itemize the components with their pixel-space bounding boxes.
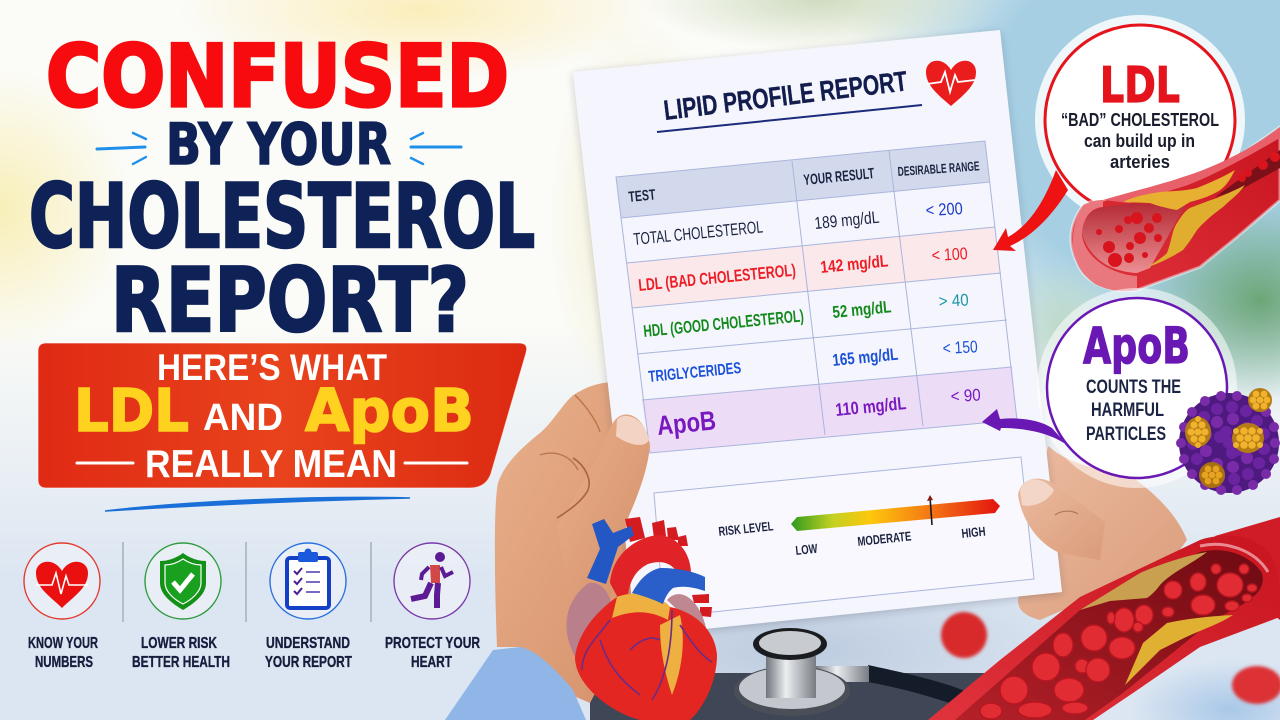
arterial plaque [1080, 552, 1233, 685]
row: ApoB: ApoB [656, 405, 717, 441]
right hand behind paper [1018, 446, 1187, 620]
row: LDL: LDL (BAD CHOLESTEROL) [638, 261, 797, 295]
artery illustration: top [1071, 127, 1280, 291]
icon: runner [411, 552, 453, 608]
row: total cholesterol: < 200 [925, 199, 963, 220]
floating blood cell [941, 612, 987, 658]
subtitle banner [38, 343, 527, 488]
table header row: TEST [628, 186, 656, 206]
row: triglycerides: 165 mg/dL [832, 345, 899, 370]
subtitle banner: ApoB [305, 376, 474, 445]
row: HDL [643, 290, 969, 341]
benefit: lower risk better health: BETTER HEALTH [132, 654, 230, 671]
row: total cholesterol: 189 mg/dL [814, 208, 880, 233]
floating blood cell [1232, 666, 1280, 704]
benefit: know your numbers: NUMBERS [35, 654, 93, 671]
icon: anatomical heart [566, 517, 717, 720]
icon: heart with pulse [36, 562, 88, 608]
headline: CHOLESTEROL [29, 165, 535, 268]
row: ApoB: < 90 [950, 385, 981, 406]
blue pulmonary artery [632, 568, 705, 604]
blue accent strokes [97, 133, 461, 164]
row: LDL: < 100 [931, 244, 968, 265]
benefit: understand your report: YOUR REPORT [265, 654, 352, 671]
row: triglycerides [648, 337, 978, 386]
coronary vessels [582, 610, 712, 700]
report title [657, 65, 922, 132]
red blood cells [980, 564, 1257, 719]
subtitle banner: HERE’S WHAT [157, 347, 387, 388]
left hand behind paper [495, 382, 660, 703]
row: HDL: HDL (GOOD CHOLESTEROL) [643, 306, 805, 341]
row: LDL [638, 244, 968, 295]
row: ApoB: 110 mg/dL [834, 393, 907, 420]
callout: ApoB: COUNTS THE [1086, 377, 1181, 398]
row: HDL: > 40 [938, 290, 969, 311]
benefit: understand your report [265, 543, 352, 671]
icon: shield with check [160, 553, 206, 610]
callout: ApoB: PARTICLES [1086, 424, 1166, 445]
row: triglycerides: < 150 [942, 337, 978, 358]
sleeve [445, 647, 586, 720]
aorta arch [610, 535, 691, 598]
headline: BY YOUR [166, 112, 391, 178]
table row fills [616, 141, 1017, 453]
row: ApoB [656, 385, 981, 441]
table surface [590, 673, 990, 720]
row: LDL: 142 mg/dL [820, 251, 889, 277]
benefit: lower risk better health [132, 543, 230, 671]
table header row: DESIRABLE RANGE [897, 158, 980, 179]
callout: ApoB [1047, 298, 1227, 478]
right thumb [1018, 479, 1105, 560]
row: triglycerides: TRIGLYCERIDES [648, 360, 742, 386]
subtitle banner: REALLY MEAN [145, 443, 397, 486]
upper red vessel stubs [625, 517, 712, 617]
callout: LDL [1045, 25, 1235, 215]
callout: ApoB: HARMFUL [1091, 400, 1164, 421]
benefit: protect your heart: PROTECT YOUR [385, 635, 480, 652]
halo around LDL callout [1035, 15, 1245, 225]
heart body [575, 594, 717, 720]
icon: report heart [926, 61, 976, 106]
callout: LDL: “BAD” CHOLESTEROL [1061, 110, 1219, 130]
headline [29, 27, 535, 352]
benefit: understand your report: UNDERSTAND [266, 635, 350, 652]
lipid results table [616, 141, 1017, 453]
callout: LDL: arteries [1110, 152, 1170, 172]
arrow: LDL to table [993, 170, 1068, 251]
table header row [628, 158, 980, 206]
blue superior vessel [587, 519, 634, 584]
halo around ApoB callout [1037, 288, 1237, 488]
benefit: protect your heart [385, 543, 480, 671]
headline: CONFUSED [46, 27, 509, 127]
risk level panel [654, 457, 1034, 617]
right pink chamber [667, 594, 706, 628]
arterial plaque [1123, 170, 1245, 267]
icon: stethoscope [734, 628, 970, 716]
risk labels: RISK LEVEL [718, 518, 774, 539]
subtitle banner: AND [203, 397, 283, 439]
benefit: lower risk better health: LOWER RISK [141, 635, 217, 652]
row: HDL: 52 mg/dL [832, 297, 892, 322]
benefit: protect your heart: HEART [411, 654, 452, 671]
callout: LDL: can build up in [1084, 131, 1195, 151]
arrow: ApoB to table [982, 409, 1067, 445]
risk labels: MODERATE [857, 528, 912, 549]
risk gradient bar [791, 495, 1000, 531]
artery illustration: bottom [928, 517, 1280, 720]
risk labels: LOW [795, 541, 819, 558]
blue swoosh under banner [105, 498, 410, 511]
benefit: know your numbers: KNOW YOUR [28, 635, 98, 652]
row: total cholesterol [633, 199, 963, 249]
headline: REPORT? [111, 249, 469, 352]
yellow fat streaks [612, 594, 683, 695]
risk labels: HIGH [961, 524, 986, 541]
benefit: know your numbers [24, 543, 100, 671]
callout: LDL: LDL [1100, 57, 1180, 114]
icon: clipboard checklist [287, 548, 329, 608]
subtitle banner: LDL [74, 376, 189, 445]
risk labels [718, 518, 986, 558]
left pink chamber [566, 583, 612, 658]
icon: ApoB particle [1176, 388, 1280, 495]
left thumb and creases [540, 395, 650, 600]
report title: LIPID PROFILE REPORT [662, 65, 909, 126]
row: total cholesterol: TOTAL CHOLESTEROL [633, 217, 764, 249]
gold clusters [1185, 416, 1211, 448]
callout: ApoB: ApoB [1083, 317, 1190, 375]
benefits row [24, 542, 480, 671]
table header row: YOUR RESULT [803, 165, 875, 189]
artery blood cells [1096, 152, 1280, 267]
report paper [573, 30, 1062, 636]
